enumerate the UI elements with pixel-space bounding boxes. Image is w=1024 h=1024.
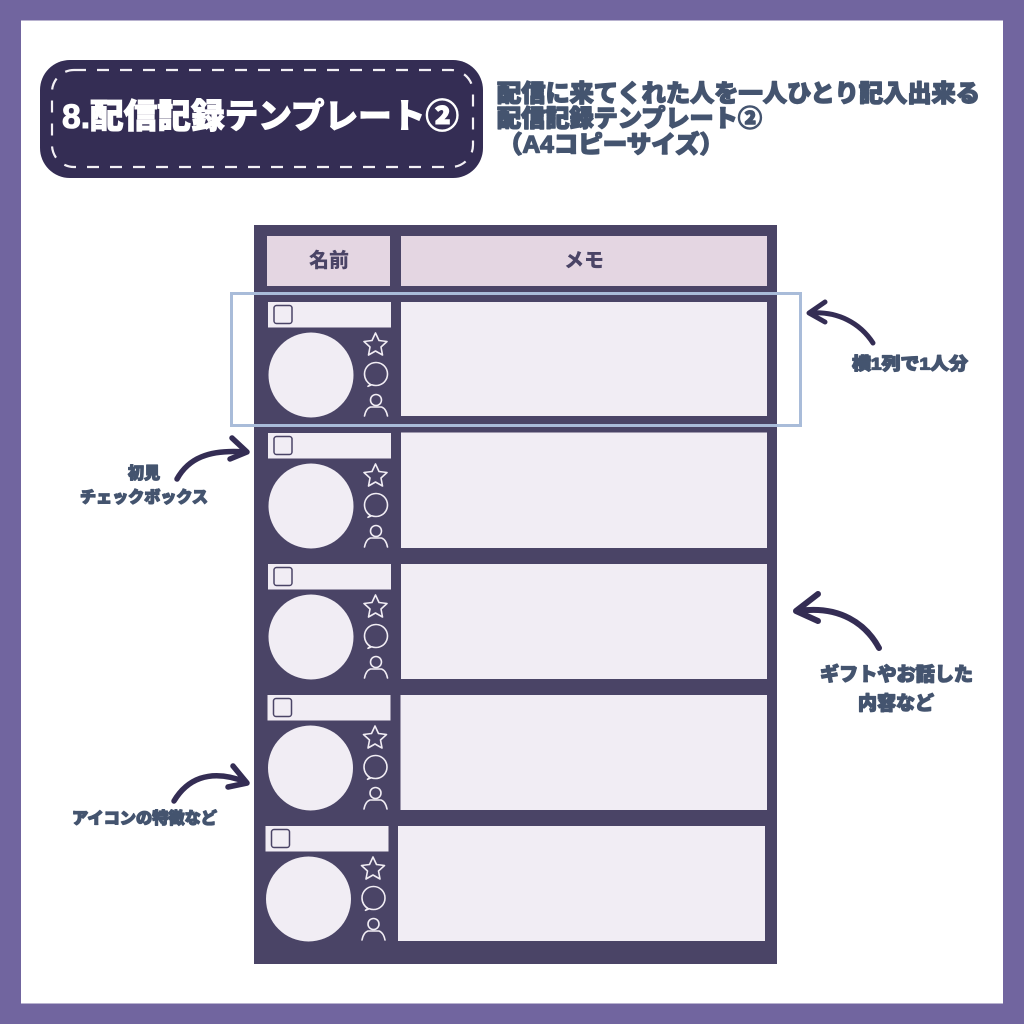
label: avatar features: アイコンの特徴など — [72, 808, 217, 828]
description text — [497, 80, 980, 158]
memo box — [400, 695, 767, 810]
checkbox — [274, 436, 292, 454]
label: gifts and topics — [820, 662, 973, 714]
row 4 — [268, 695, 767, 810]
row 1 — [268, 302, 767, 418]
memo box — [398, 826, 765, 941]
row 2 — [268, 432, 767, 548]
icon: star — [364, 726, 386, 748]
name box — [268, 695, 390, 720]
label: gifts and topics: 内容など — [858, 692, 934, 714]
avatar circle — [268, 464, 354, 548]
icon: star — [364, 333, 387, 355]
name box — [268, 433, 391, 458]
checkbox — [274, 568, 292, 586]
highlight frame: one row — [232, 294, 800, 426]
memo box — [401, 564, 767, 679]
icon: star — [364, 464, 387, 486]
icon: speech bubble — [362, 887, 385, 910]
label: gifts and topics: ギフトやお話した — [820, 662, 973, 686]
icon: person — [364, 526, 388, 547]
icon: person — [364, 656, 388, 678]
label: first-time checkbox: チェックボックス — [80, 488, 208, 506]
checkbox — [274, 698, 292, 716]
name box — [268, 302, 391, 328]
arrow: to highlight frame — [809, 302, 873, 343]
header: name column — [267, 236, 390, 286]
arrow: to checkbox — [177, 438, 247, 479]
icon: speech bubble — [364, 362, 388, 386]
label: one row per person: 横1列で1人分 — [852, 354, 968, 374]
icon: speech bubble — [364, 494, 388, 517]
icon: star — [362, 857, 384, 879]
name box — [268, 564, 391, 590]
description text: （A4コピーサイズ） — [498, 130, 724, 158]
header: memo column: メモ — [564, 250, 604, 272]
row 5 — [266, 826, 765, 942]
checkbox — [274, 306, 292, 324]
description text: 配信記録テンプレート② — [497, 106, 762, 132]
checkbox — [272, 830, 290, 848]
icon: person — [364, 788, 387, 809]
label: first-time checkbox — [80, 464, 208, 506]
memo box — [401, 432, 767, 548]
memo box — [401, 302, 767, 416]
template sheet — [254, 225, 777, 964]
avatar circle — [268, 594, 354, 680]
header: name column: 名前 — [309, 248, 349, 272]
icon: person — [362, 918, 385, 940]
avatar circle — [268, 332, 354, 418]
row 3 — [268, 564, 767, 680]
icon: star — [364, 595, 387, 617]
icon: speech bubble — [364, 756, 387, 779]
title badge: 8.配信記録テンプレート② — [62, 98, 459, 136]
name box — [266, 826, 388, 852]
description text: 配信に来てくれた人を一人ひとり記入出来る — [497, 80, 980, 108]
icon: speech bubble — [364, 624, 388, 648]
avatar circle — [268, 726, 353, 810]
arrow: to memo — [796, 594, 879, 648]
icon: person — [364, 394, 388, 416]
label: first-time checkbox: 初見 — [128, 464, 160, 482]
arrow: to avatar — [174, 766, 247, 801]
header: memo column — [401, 236, 767, 286]
title badge — [40, 60, 483, 178]
avatar circle — [266, 856, 351, 942]
